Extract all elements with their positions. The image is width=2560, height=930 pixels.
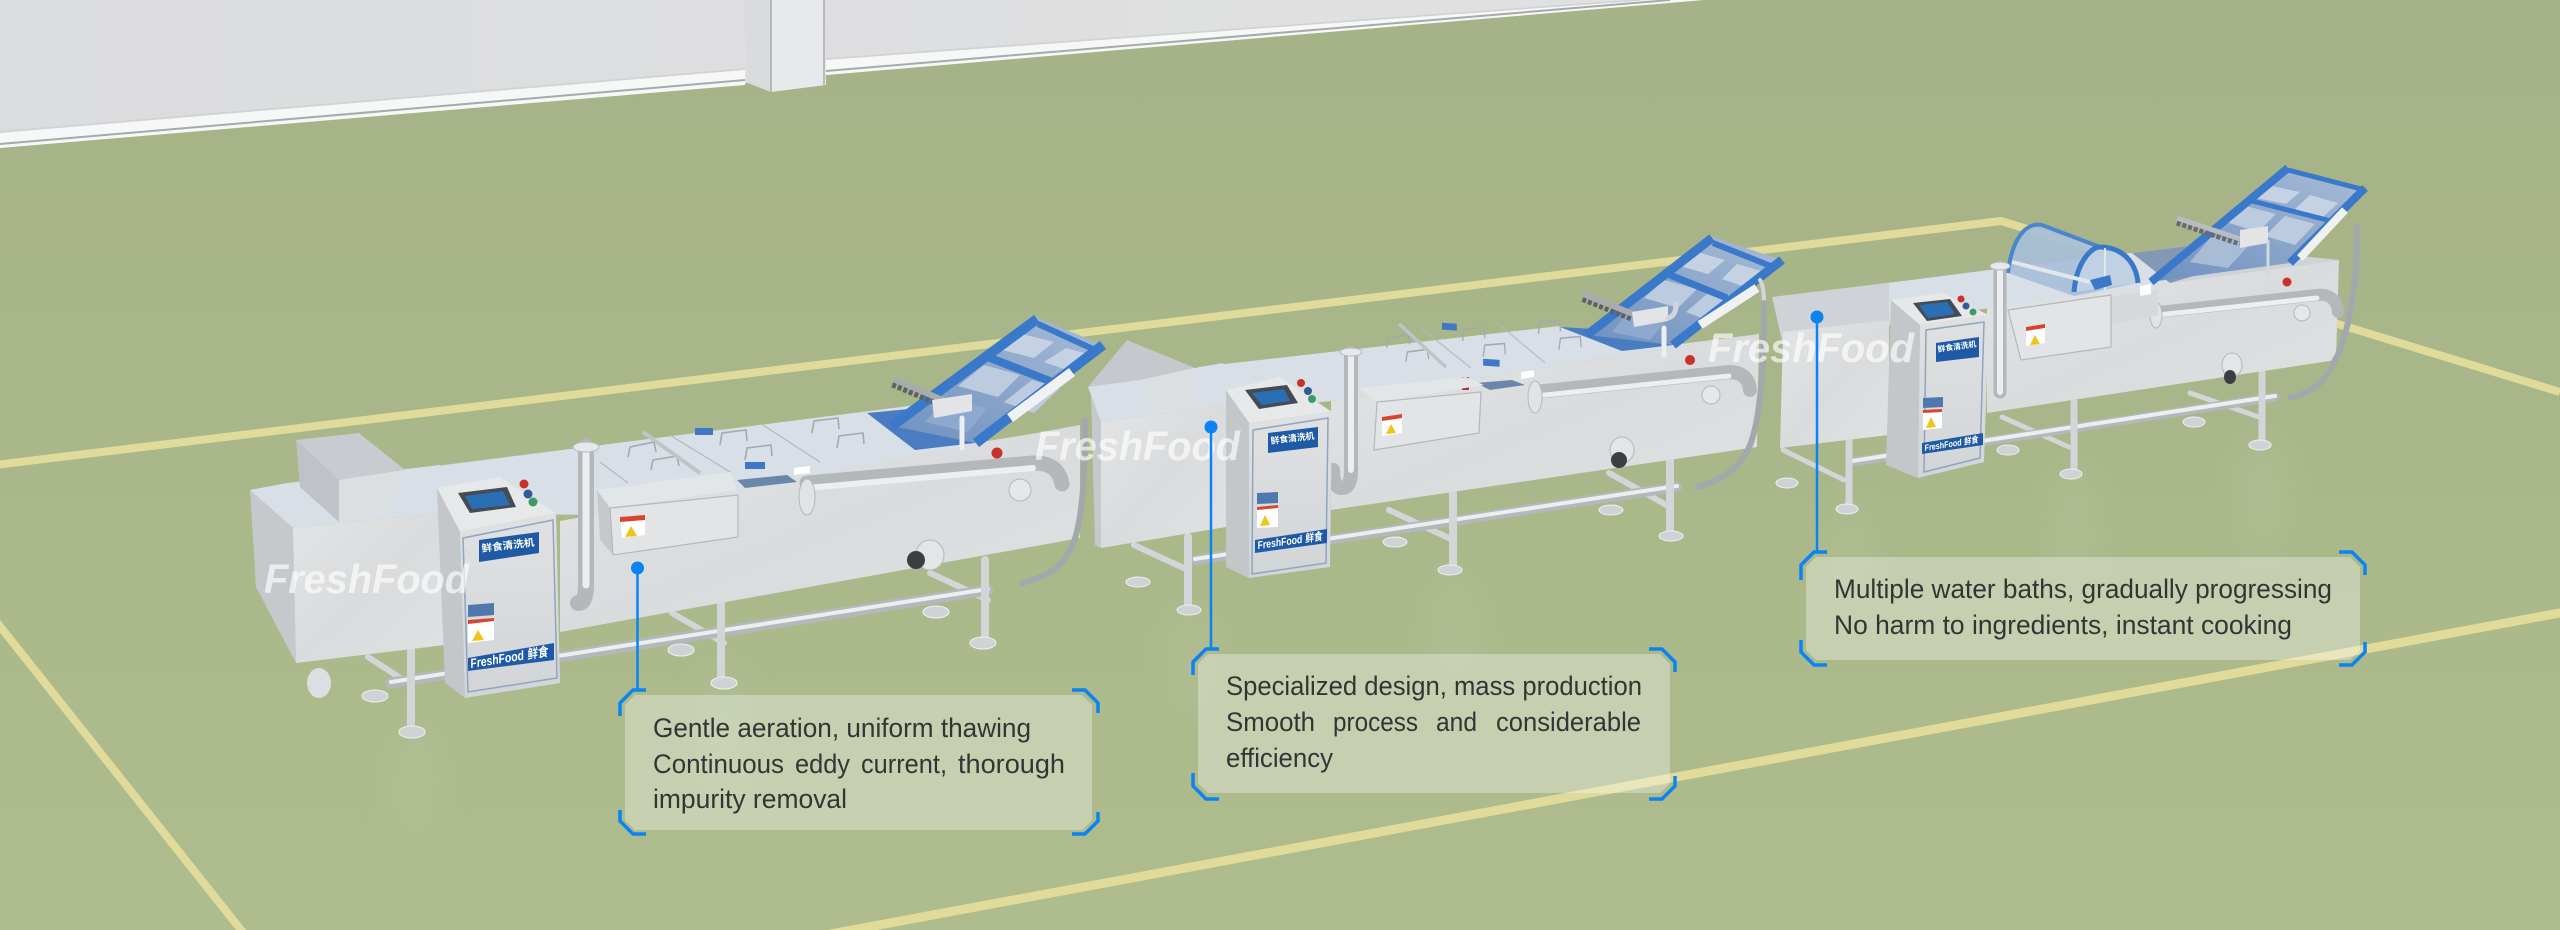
body top surface — [405, 405, 1080, 515]
vertical pipe — [1333, 348, 1362, 488]
callout panel — [1806, 557, 2360, 660]
warning sticker — [1257, 505, 1278, 528]
callout text: process — [1333, 707, 1418, 737]
callout 3: water baths — [1801, 310, 2365, 665]
side pipe — [1462, 355, 1750, 413]
nameplate: 鲜食清洗机 — [481, 536, 535, 555]
callout text: Continuous — [653, 749, 784, 779]
drain valve — [1610, 437, 1634, 468]
machine unit 1 — [250, 318, 1103, 738]
main body — [1987, 260, 2339, 413]
callout text: eddy — [795, 749, 850, 779]
side pipe — [2111, 278, 2338, 328]
inspection door — [2008, 295, 2111, 360]
spray bar — [2177, 210, 2345, 275]
callout panel — [625, 695, 1092, 830]
callout text: considerable — [1496, 707, 1641, 737]
logo plate: FreshFood 鲜食 — [1257, 530, 1324, 552]
wall — [0, 0, 1703, 148]
hose — [1022, 420, 1085, 583]
tank top surface — [250, 465, 440, 528]
control cabinet — [437, 477, 560, 698]
inspection door — [1359, 377, 1484, 450]
QR label — [1257, 492, 1278, 504]
warning sticker — [468, 618, 494, 643]
callout text: Gentle aeration, uniform thawing — [653, 713, 1031, 743]
callout 2: specialized design — [1193, 420, 1675, 799]
legs and pipes — [1776, 373, 2275, 514]
callout text — [1834, 574, 2332, 640]
control buttons — [1297, 379, 1316, 403]
dome cover — [2008, 225, 2138, 296]
yellow floor lines — [0, 221, 2560, 930]
callout panel — [1198, 654, 1670, 793]
watermark: middle: FreshFood — [1035, 423, 1241, 469]
control cabinet — [1886, 293, 1989, 478]
inner blue wall — [2132, 245, 2240, 283]
vertical pipe — [573, 442, 599, 603]
far wall of tank — [1772, 245, 2339, 345]
corner brackets — [1193, 649, 1675, 799]
control buttons — [520, 480, 538, 506]
callout text: impurity removal — [653, 784, 847, 814]
intake tank — [1780, 320, 1889, 448]
control cabinet — [1226, 377, 1332, 578]
control buttons — [1958, 296, 1976, 316]
tank top surface — [1088, 363, 1226, 422]
callout text — [1226, 671, 1642, 773]
callout text: No harm to ingredients, instant cooking — [1834, 610, 2292, 640]
feed hopper — [1088, 340, 1196, 410]
callout text — [653, 713, 1065, 814]
inclined blue conveyor — [867, 318, 1103, 450]
floor reflections — [393, 435, 2286, 840]
corner brackets — [1801, 552, 2365, 665]
inclined blue conveyor — [2151, 168, 2365, 282]
inclined blue conveyor — [1560, 237, 1782, 351]
intake tank — [1091, 395, 1101, 548]
callout text: Smooth — [1226, 707, 1315, 737]
leader line — [631, 562, 644, 690]
callout text: current, — [861, 749, 947, 779]
legs and pipes — [307, 560, 996, 738]
leader line — [1810, 310, 1824, 552]
touch screen — [458, 487, 516, 513]
hose — [1698, 303, 1764, 487]
QR label — [1923, 397, 1943, 408]
feed hopper — [296, 433, 405, 522]
callout text: thorough — [958, 749, 1065, 779]
callout text: Specialized design, mass production — [1226, 671, 1642, 701]
QR label — [468, 603, 494, 617]
callout text: efficiency — [1226, 743, 1333, 773]
leader line — [1204, 420, 1218, 649]
callout text: Multiple water baths, gradually progressing — [1834, 574, 2332, 604]
nameplate — [1268, 427, 1318, 453]
touch screen — [1245, 385, 1298, 409]
nameplate — [479, 532, 539, 562]
drain valve — [2222, 353, 2242, 384]
main body — [1331, 334, 1759, 510]
spray bar — [1583, 280, 1764, 355]
lids and handles — [600, 418, 864, 483]
callout text: and — [1436, 707, 1477, 737]
corner brackets — [620, 690, 1098, 834]
skirting board — [0, 0, 1703, 148]
intake tank — [250, 490, 296, 663]
machine unit 2 — [1088, 237, 1782, 615]
legs and pipes — [1126, 460, 1683, 615]
logo plate: FreshFood 鲜食 — [469, 644, 550, 671]
hose — [2290, 227, 2357, 398]
touch screen — [1913, 299, 1962, 321]
body top surface — [1889, 253, 2170, 320]
vertical pipe — [1990, 262, 2010, 392]
body top surface — [1198, 326, 1759, 412]
spray bar — [893, 372, 1072, 448]
logo plate: FreshFood 鲜食 — [1924, 434, 1980, 453]
main body — [560, 425, 1080, 632]
nameplate: 鲜食清洗机 — [1937, 339, 1977, 354]
lids and handles — [1387, 309, 1581, 376]
warning sticker — [1923, 409, 1942, 430]
nameplate — [1936, 337, 1979, 362]
inspection door — [597, 472, 738, 555]
machine unit 3: washer with dome — [1772, 168, 2365, 514]
watermark: left: FreshFood — [264, 556, 470, 602]
drain valve — [907, 540, 944, 570]
nameplate: 鲜食清洗机 — [1270, 430, 1315, 446]
side pipe — [720, 448, 1062, 515]
watermark: right: FreshFood — [1708, 325, 1915, 371]
callout 1: thawing — [620, 562, 1098, 834]
wall pillar — [743, 0, 826, 92]
